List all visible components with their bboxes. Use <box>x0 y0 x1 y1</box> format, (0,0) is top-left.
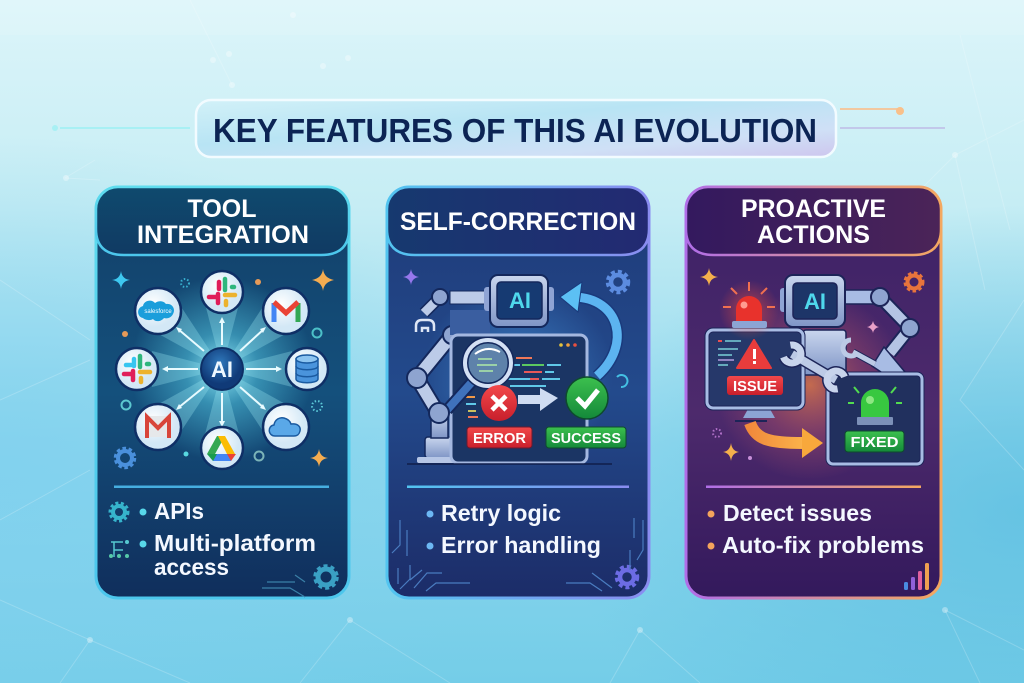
heading: proactive actions <box>686 187 941 255</box>
divider <box>114 486 329 488</box>
heading: self-correction: SELF-CORRECTION <box>400 208 636 236</box>
label: issue <box>727 376 783 395</box>
icon: database <box>286 348 328 390</box>
icon: gmail lower <box>135 404 181 450</box>
left monitor: issue <box>707 330 803 421</box>
feature list: access <box>154 554 229 580</box>
decorative sparkles and gears <box>700 268 923 461</box>
heading: tool integration <box>96 187 349 255</box>
wrench <box>784 345 844 389</box>
error to success flow <box>481 377 608 421</box>
icon: salesforce <box>135 288 181 334</box>
feature list <box>109 498 316 580</box>
hub diagram <box>116 271 328 469</box>
divider <box>407 486 629 488</box>
heading: proactive actions: ACTIONS <box>757 221 870 249</box>
label: fixed <box>845 431 904 452</box>
title banner <box>196 100 836 157</box>
heading: tool integration: INTEGRATION <box>137 221 309 249</box>
heading: proactive actions: PROACTIVE <box>741 195 886 223</box>
feature list <box>708 500 924 558</box>
label: issue: ISSUE <box>733 379 777 395</box>
label: success <box>546 427 626 448</box>
robot head <box>484 275 554 327</box>
robot <box>780 275 919 378</box>
label: error <box>467 427 532 448</box>
icon: AI hub: AI <box>211 357 233 382</box>
icon: slack left <box>116 348 158 390</box>
feature list <box>426 500 601 558</box>
heading: self-correction <box>387 187 649 255</box>
gear and circuit <box>262 566 337 597</box>
heading: tool integration: TOOL <box>188 195 256 223</box>
icon: google drive <box>201 427 243 469</box>
orange arrow <box>750 423 823 458</box>
icon: slack top <box>201 271 243 313</box>
label: success: SUCCESS <box>551 431 621 447</box>
title banner: KEY FEATURES OF THIS AI EVOLUTION <box>213 112 817 149</box>
divider <box>706 486 921 488</box>
label: error: ERROR <box>473 431 527 447</box>
panel: self-correction <box>387 187 649 598</box>
robot arm <box>407 289 492 463</box>
decorative sparkles and gears <box>112 269 334 468</box>
icon: AI hub <box>201 348 243 390</box>
label: fixed: FIXED <box>850 435 898 451</box>
icon: bar chart <box>904 563 929 590</box>
icon: cloud <box>263 404 309 450</box>
robot: AI <box>804 289 826 314</box>
icon: salesforce: salesforce <box>144 309 172 315</box>
panel: tool integration <box>96 187 349 598</box>
feature list: Error handling <box>441 532 601 558</box>
icon: gmail top <box>263 288 309 334</box>
feature list: Detect issues <box>723 500 872 526</box>
right monitor: fixed <box>828 374 922 464</box>
illustration: detect and fix <box>707 275 922 480</box>
panel: proactive actions <box>686 187 941 598</box>
illustration: robot fixing error <box>407 275 627 470</box>
monitor <box>451 335 587 463</box>
red alarm <box>719 280 779 340</box>
feature list: Multi-platform <box>154 530 316 556</box>
curved retry arrow <box>560 282 627 387</box>
feature list: Retry logic <box>441 500 561 526</box>
feature list: APIs <box>154 498 204 524</box>
decorative sparkles and gears <box>392 269 643 591</box>
robot head: AI <box>509 288 531 313</box>
feature list: Auto-fix problems <box>722 532 924 558</box>
magnifying glass <box>429 340 511 423</box>
